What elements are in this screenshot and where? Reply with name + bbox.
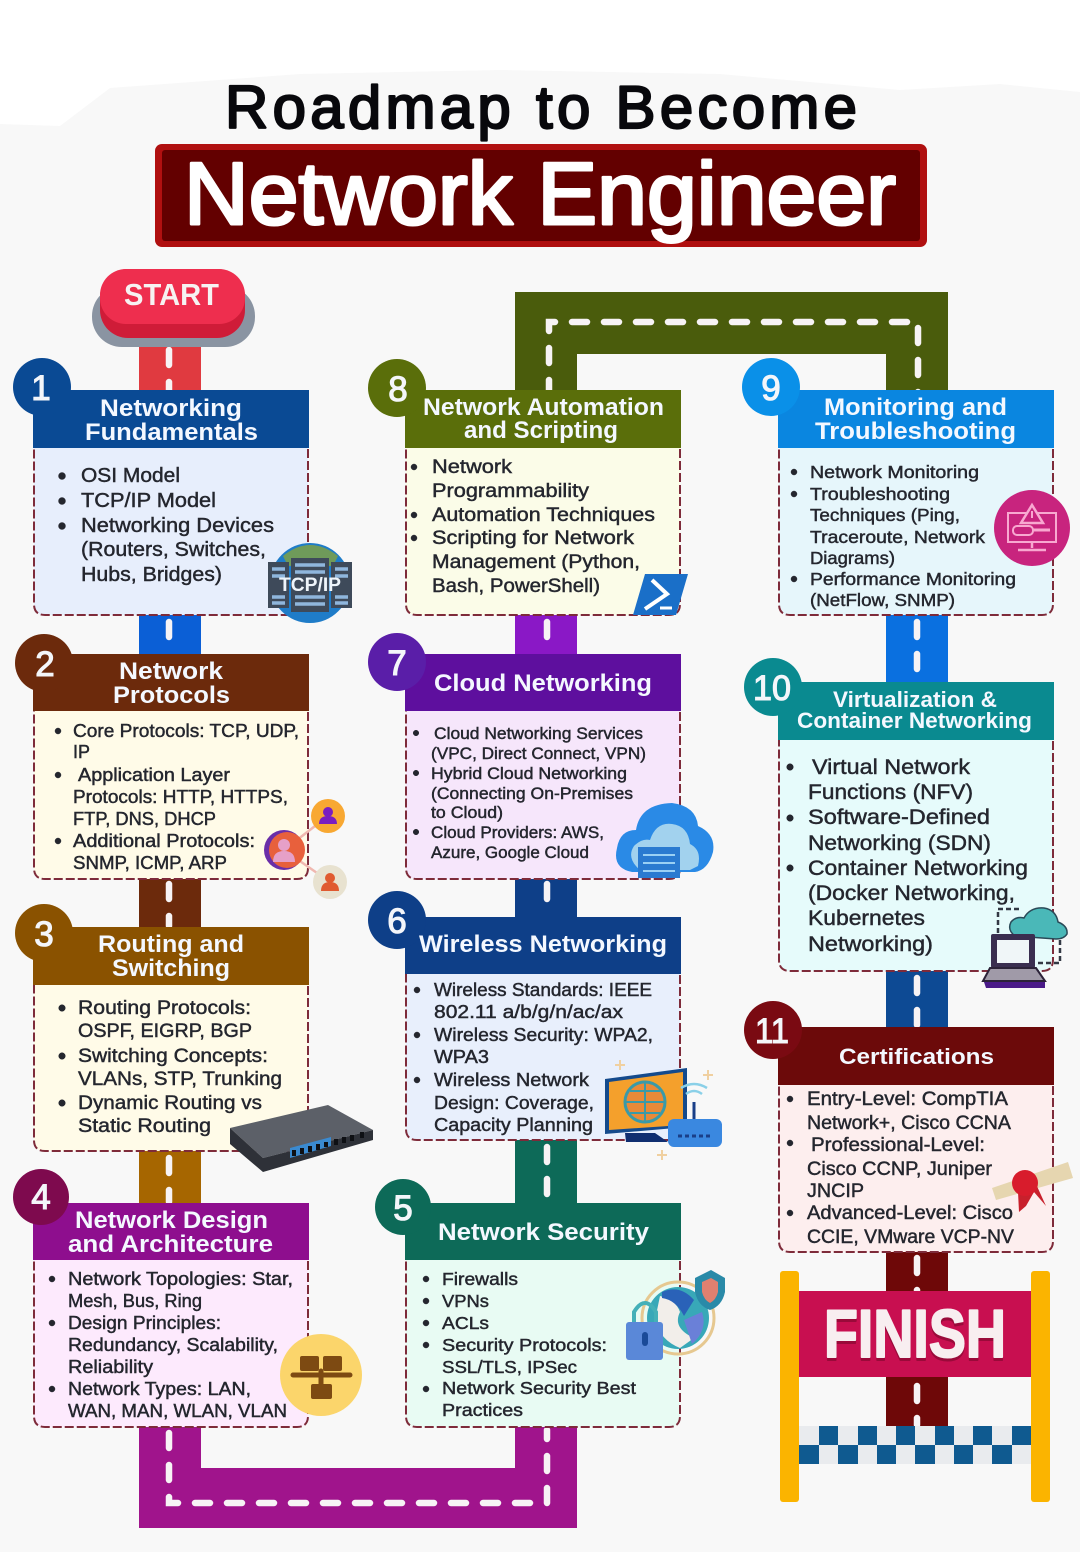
heading 9: Monitoring and <box>824 394 1007 421</box>
list 8: Scripting for Network <box>432 528 635 549</box>
road: step 1 to step 2 <box>139 614 201 656</box>
icon: cloud server <box>616 803 713 878</box>
list 7: (VPC, Direct Connect, VPN) <box>431 745 646 763</box>
heading 4 <box>68 1207 273 1258</box>
list 3: OSPF, EIGRP, BGP <box>78 1020 252 1042</box>
badge 6: 6 <box>387 902 407 941</box>
list 9: Techniques (Ping, <box>810 505 960 525</box>
list 9: Diagrams) <box>810 548 895 568</box>
list 10: Virtual Network <box>812 756 971 779</box>
list 4: Reliability <box>68 1357 153 1377</box>
badge 4: 4 <box>31 1178 51 1217</box>
list 4: Redundancy, Scalability, <box>68 1335 278 1355</box>
badge 7 <box>368 633 426 691</box>
list 10: Kubernetes <box>808 907 925 930</box>
list 6: WPA3 <box>434 1046 489 1067</box>
road: step 7 to step 8 <box>515 614 577 656</box>
badge 1: 1 <box>31 369 51 408</box>
list 2: Protocols: HTTP, HTTPS, <box>73 787 288 807</box>
list 5: Firewalls <box>442 1269 518 1289</box>
list 11: Network+, Cisco CCNA <box>807 1113 1011 1134</box>
heading 4: Network Design <box>75 1207 268 1234</box>
title line: Roadmap to Become: Roadmap to Become <box>225 74 857 141</box>
road: purple loop from step 4 to step 5 <box>139 1425 577 1528</box>
panel: step 3 routing and switching <box>15 904 373 1172</box>
finish posts <box>780 1271 1050 1502</box>
list 2 <box>55 721 299 873</box>
list 10: (Docker Networking, <box>808 882 1015 905</box>
badge 8 <box>368 359 426 417</box>
road: step 9 to step 10 <box>886 614 948 684</box>
road: step 11 to finish <box>886 1251 948 1427</box>
heading 10 <box>797 687 1032 733</box>
list 5 <box>423 1269 636 1420</box>
road: step 2 to step 3 <box>139 878 201 929</box>
list 4: Mesh, Bus, Ring <box>68 1291 202 1311</box>
list 5: VPNs <box>442 1291 489 1311</box>
heading 2 <box>113 658 230 709</box>
panel: step 1 networking fundamentals <box>13 358 352 623</box>
list 4: WAN, MAN, WLAN, VLAN <box>68 1401 287 1421</box>
road: step 3 to step 4 <box>139 1150 201 1205</box>
list 5: Network Security Best <box>442 1378 636 1398</box>
list 7: (Connecting On-Premises <box>431 785 633 803</box>
road: start to step 1 <box>139 345 201 393</box>
panel: step 11 certifications <box>744 1001 1073 1252</box>
list 9: Network Monitoring <box>810 462 979 482</box>
list 6: Design: Coverage, <box>434 1092 594 1113</box>
heading 6: Wireless Networking <box>419 931 667 958</box>
badge 6 <box>368 891 426 949</box>
list 5: SSL/TLS, IPSec <box>442 1357 577 1377</box>
heading 3 <box>98 931 244 982</box>
heading 1: Networking <box>100 395 242 422</box>
badge 11 <box>744 1001 802 1059</box>
list 6: Wireless Network <box>434 1069 590 1090</box>
list 10 <box>787 756 1028 956</box>
road: step 6 to step 7 <box>515 878 577 919</box>
list 10: Networking (SDN) <box>808 832 991 855</box>
list 4 <box>49 1269 293 1421</box>
list 2: Application Layer <box>78 765 230 785</box>
badge 7: 7 <box>387 644 407 683</box>
icon: network topology <box>280 1334 362 1416</box>
panel: step 10 virtualization and container networking <box>744 658 1067 988</box>
badge 10: 10 <box>753 669 791 708</box>
list 6: Wireless Standards: IEEE <box>434 979 652 1000</box>
finish banner: FINISH <box>824 1299 1006 1375</box>
icon: PowerShell <box>633 574 688 615</box>
list 11: Advanced-Level: Cisco <box>807 1203 1013 1224</box>
list 11 <box>787 1089 1014 1248</box>
heading 3: Switching <box>112 955 230 982</box>
panel: step 5 network security <box>375 1179 725 1427</box>
finish banner: FINISH <box>824 1296 1006 1372</box>
list 5: Practices <box>442 1400 523 1420</box>
list 10: Container Networking <box>808 857 1028 880</box>
list 6: Wireless Security: WPA2, <box>434 1024 653 1045</box>
badge 5: 5 <box>393 1189 413 1228</box>
list 3: Static Routing <box>78 1115 211 1137</box>
list 1: TCP/IP Model <box>81 489 216 512</box>
list 10: Software-Defined <box>808 806 990 829</box>
finish gate <box>780 1271 1050 1502</box>
list 4: Network Types: LAN, <box>68 1379 251 1399</box>
list 1: (Routers, Switches, <box>81 538 266 561</box>
list 2: SNMP, ICMP, ARP <box>73 853 227 873</box>
badge 1 <box>13 358 71 416</box>
list 8: Management (Python, <box>432 552 640 573</box>
badge 10 <box>744 658 802 716</box>
panel: step 8 network automation and scripting <box>368 359 688 615</box>
heading 8 <box>423 394 664 444</box>
icon: wireless monitor and router <box>605 1060 722 1160</box>
badge 8: 8 <box>388 370 408 409</box>
badge 3 <box>15 904 73 962</box>
heading 2: Protocols <box>113 682 230 709</box>
badge 4 <box>13 1169 69 1225</box>
icon: network switch <box>230 1105 373 1172</box>
panel: step 9 monitoring and troubleshooting <box>742 358 1070 615</box>
list 7: to Cloud) <box>431 804 503 822</box>
list 5: Security Protocols: <box>442 1335 607 1355</box>
icon: diploma scroll <box>992 1162 1073 1212</box>
road: step 5 to step 6 <box>515 1139 577 1205</box>
list 6: 802.11 a/b/g/n/ac/ax <box>434 1001 624 1022</box>
list 11: Cisco CCNP, Juniper <box>807 1159 993 1180</box>
start button: START <box>124 277 219 312</box>
list 9: Performance Monitoring <box>810 569 1016 589</box>
heading 9: Troubleshooting <box>815 418 1016 445</box>
list 3: Dynamic Routing vs <box>78 1092 262 1114</box>
heading 9 <box>815 394 1016 445</box>
badge 5 <box>375 1179 431 1235</box>
list 4: Network Topologies: Star, <box>68 1269 293 1289</box>
heading 8: and Scripting <box>464 417 618 444</box>
heading 11: Certifications <box>839 1044 994 1069</box>
start button <box>92 269 255 347</box>
list 1: Networking Devices <box>81 514 274 537</box>
list 7 <box>413 725 646 862</box>
list 8: Automation Techniques <box>432 505 655 526</box>
badge 3: 3 <box>34 915 54 954</box>
list 8: Network <box>432 457 513 478</box>
badge 9 <box>742 358 800 416</box>
list 11: Entry-Level: CompTIA <box>807 1089 1008 1110</box>
list 1: Hubs, Bridges) <box>81 563 222 586</box>
heading 3: Routing and <box>98 931 244 958</box>
heading 1: Fundamentals <box>85 419 258 446</box>
list 10: Networking) <box>808 933 933 956</box>
heading 4: and Architecture <box>68 1231 273 1258</box>
list 2: Core Protocols: TCP, UDP, <box>73 721 299 741</box>
list 10: Functions (NFV) <box>808 781 973 804</box>
list 1: OSI Model <box>81 464 180 487</box>
list 7: Cloud Providers: AWS, <box>431 824 604 842</box>
list 4: Design Principles: <box>68 1313 221 1333</box>
list 8: Bash, PowerShell) <box>432 576 600 597</box>
icon: laptop and cloud <box>983 908 1067 988</box>
icon: shield, lock and globe <box>626 1270 725 1360</box>
list 11: CCIE, VMware VCP-NV <box>807 1227 1014 1248</box>
list 3: Routing Protocols: <box>78 997 251 1019</box>
badge 2: 2 <box>35 645 55 684</box>
list 11: JNCIP <box>807 1181 864 1202</box>
list 11: Professional-Level: <box>811 1135 985 1156</box>
list 7: Azure, Google Cloud <box>431 844 589 862</box>
list 9: (NetFlow, SNMP) <box>810 590 955 610</box>
list 3: VLANs, STP, Trunking <box>78 1068 282 1090</box>
list 7: Cloud Networking Services <box>434 725 643 743</box>
heading 2: Network <box>119 658 224 685</box>
list 9 <box>791 462 1016 610</box>
badge 2 <box>15 634 73 692</box>
list 3: Switching Concepts: <box>78 1045 268 1067</box>
panel: step 2 network protocols <box>15 634 347 899</box>
icon: connected users <box>264 799 347 899</box>
panel: step 4 network design and architecture <box>13 1169 362 1427</box>
icon: monitoring alert <box>994 490 1070 566</box>
list 6: Capacity Planning <box>434 1114 593 1135</box>
list 1 <box>58 464 274 586</box>
badge 9: 9 <box>761 369 781 408</box>
title banner: Network Engineer: Network Engineer <box>184 144 896 243</box>
checkered finish line <box>799 1426 1031 1464</box>
road: green loop from step 8 to step 9 <box>515 292 948 395</box>
panel: step 6 wireless networking <box>368 891 722 1160</box>
icon: TCP/IP globe servers: TCP/IP <box>279 575 341 596</box>
list 6 <box>414 979 653 1135</box>
list 9: Traceroute, Network <box>810 527 985 547</box>
heading 8: Network Automation <box>423 394 664 421</box>
badge 11: 11 <box>755 1012 789 1051</box>
icon: TCP/IP globe servers <box>268 543 352 623</box>
heading 10: Container Networking <box>797 708 1032 733</box>
heading 7: Cloud Networking <box>434 670 652 697</box>
list 8 <box>411 457 655 597</box>
heading 5: Network Security <box>438 1219 650 1246</box>
list 9: Troubleshooting <box>810 484 950 504</box>
list 7: Hybrid Cloud Networking <box>431 765 627 783</box>
list 3 <box>59 997 282 1137</box>
list 2: Additional Protocols: <box>73 831 255 851</box>
list 2: IP <box>73 742 90 762</box>
list 2: FTP, DNS, DHCP <box>73 809 216 829</box>
list 8: Programmability <box>432 481 590 502</box>
panel: step 7 cloud networking <box>368 633 713 879</box>
heading 1 <box>85 395 258 446</box>
list 5: ACLs <box>442 1313 489 1333</box>
heading 10: Virtualization & <box>833 687 997 712</box>
road: step 10 to step 11 <box>886 970 948 1029</box>
